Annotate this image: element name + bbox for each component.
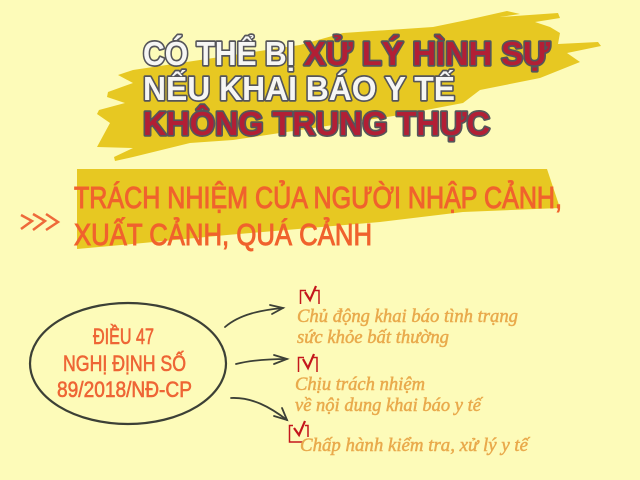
title line 2: NẾU KHAI BÁO Y TẾ [143,70,455,107]
item 1 text [297,306,518,348]
checkbox 2 [298,354,317,372]
item 1 text: Chủ động khai báo tình trạng [297,306,518,327]
heading line 2: XUẤT CẢNH, QUÁ CẢNH [74,217,372,252]
ellipse text: ĐIỀU 47 [93,324,154,349]
ellipse: legal reference [30,303,226,424]
yellow brush stroke behind title [97,11,601,161]
section heading band [77,169,560,249]
arrow 3 [231,398,287,420]
ellipse text: 89/2018/NĐ-CP [57,377,192,402]
item 2 text [295,374,483,416]
arrow 2 [236,355,287,364]
ellipse text: NGHỊ ĐỊNH SỐ [63,350,186,376]
checkbox 1 [300,286,319,304]
checkbox 3 [290,421,308,442]
title [143,35,551,142]
title line 1 red part: XỬ LÝ HÌNH SỰ [304,35,551,72]
ellipse text [57,324,192,402]
icon: triple chevrons [21,214,58,230]
title line 3: KHÔNG TRUNG THỰC [143,104,490,142]
title line 1 white part: CÓ THỂ BỊ [143,35,295,72]
item 2 text: về nội dung khai báo y tế [295,395,483,416]
item 3 text: Chấp hành kiểm tra, xử lý y tế [300,435,531,456]
section heading [74,179,562,252]
item 2 text: Chịu trách nhiệm [295,374,425,395]
item 1 text: sức khỏe bất thường [297,327,449,348]
arrow 1 [225,305,283,327]
